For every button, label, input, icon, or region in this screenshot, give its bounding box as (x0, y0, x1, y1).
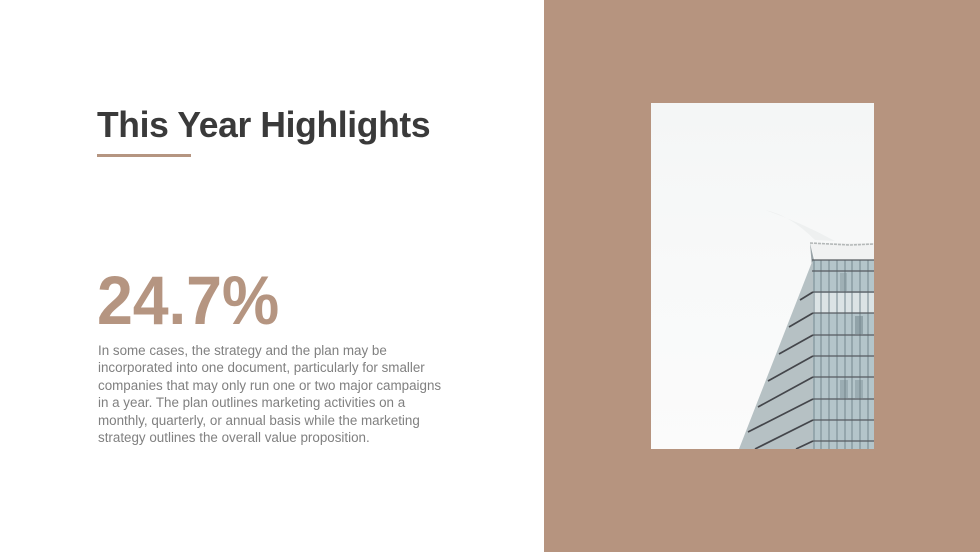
body text: in a year. The plan outlines marketing activities on a (98, 395, 405, 410)
building (739, 243, 874, 449)
title: This Year Highlights (97, 104, 430, 145)
title underline (97, 154, 191, 157)
body text: In some cases, the strategy and the plan may be (98, 343, 387, 358)
body text: strategy outlines the overall value proposition. (98, 430, 370, 445)
body text: incorporated into one document, particularly for smaller (98, 360, 425, 375)
body text: companies that may only run one or two major campaigns (98, 378, 441, 393)
photo: glass building against a pale sky (651, 103, 874, 449)
panel: brown right background (544, 0, 980, 552)
big statistic: 24.7% (97, 262, 279, 339)
body text: monthly, quarterly, or annual basis while the marketing (98, 413, 420, 428)
body text (98, 343, 441, 445)
